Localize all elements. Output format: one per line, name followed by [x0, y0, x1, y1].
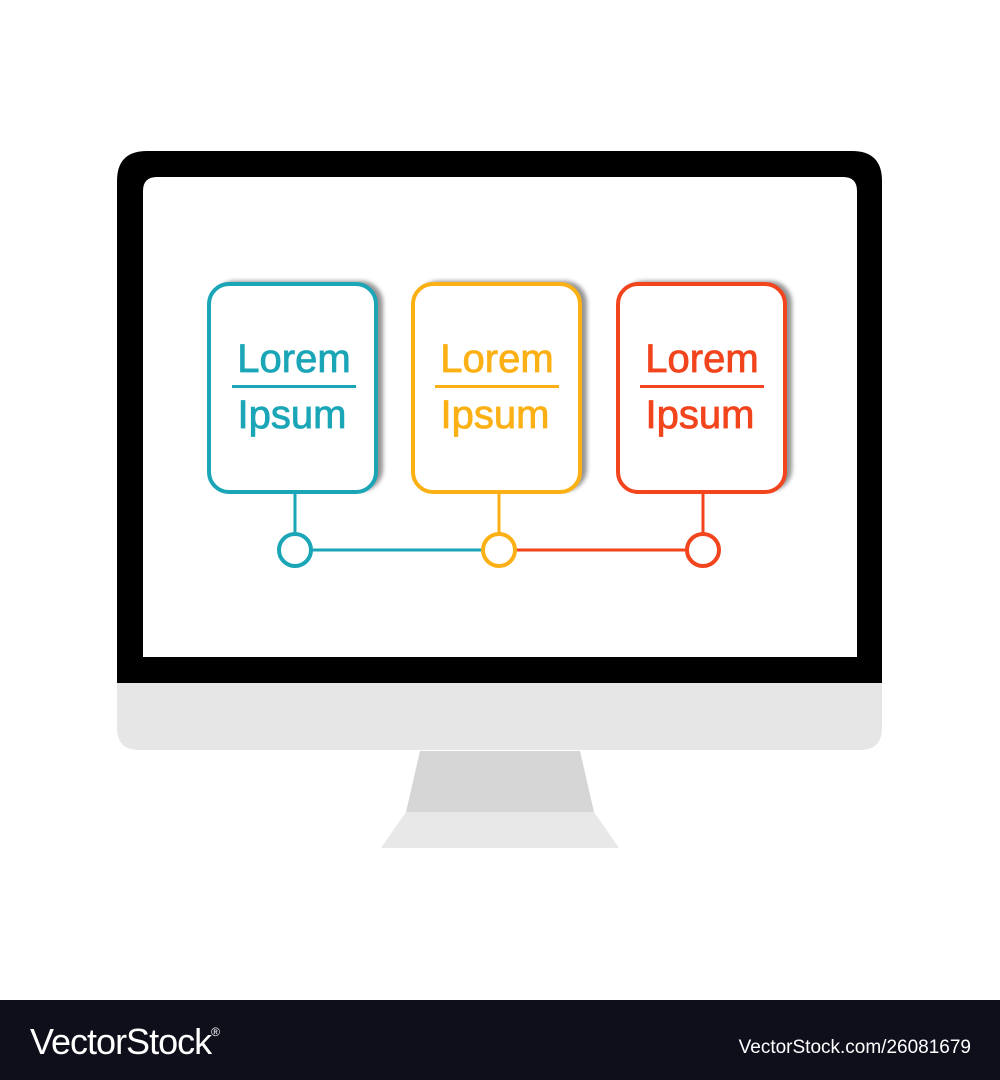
footer bar — [0, 1000, 1000, 1080]
monitor stand — [381, 751, 619, 848]
card: red: Lorem — [645, 337, 759, 381]
monitor frame — [117, 151, 882, 750]
card: red: Ipsum — [646, 393, 754, 437]
footer bar: ® — [211, 1025, 220, 1039]
card: yellow: Ipsum — [441, 393, 549, 437]
connector lines — [311, 548, 687, 552]
card: yellow — [413, 281, 587, 566]
footer bar: VectorStock.com/26081679 — [739, 1037, 971, 1058]
card: red — [618, 281, 792, 566]
card: teal: Ipsum — [238, 393, 346, 437]
card: teal: Lorem — [237, 337, 351, 381]
footer bar: VectorStock — [30, 1021, 211, 1062]
card: yellow: Lorem — [440, 337, 554, 381]
card: teal — [209, 281, 383, 566]
